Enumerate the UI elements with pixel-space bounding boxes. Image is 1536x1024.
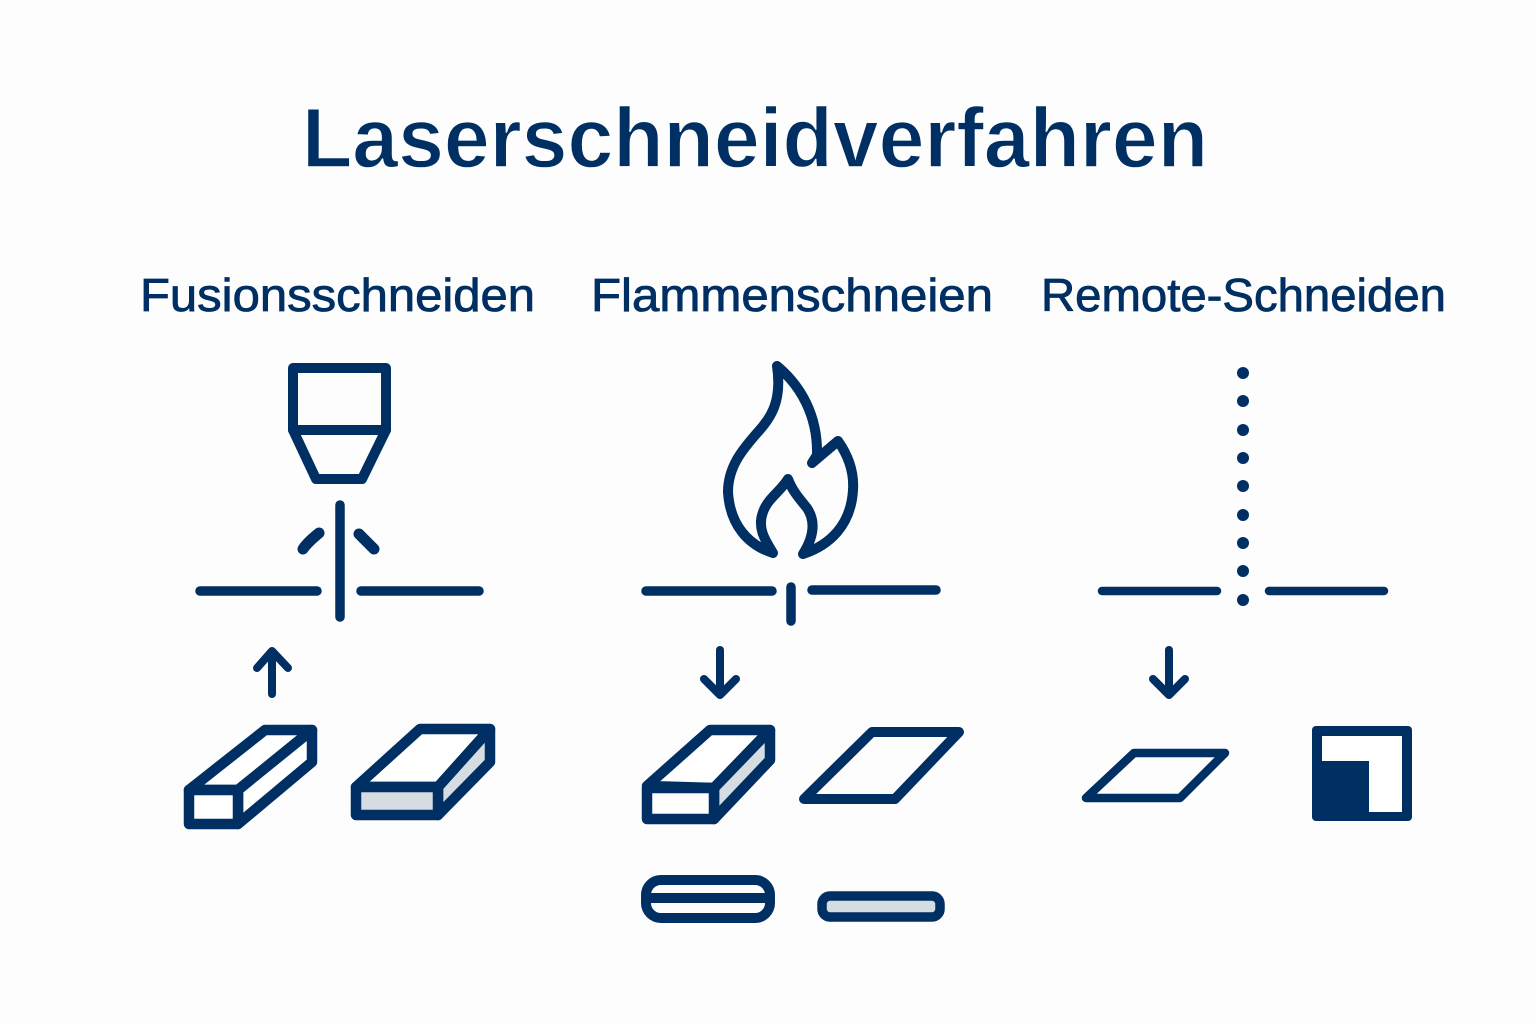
panel: Flammenschneiden diagrams [646,366,959,918]
panel: Fusionsschneiden diagrams [189,368,490,824]
arrow: up [257,651,288,694]
panel: Remote-Schneiden diagrams [1086,367,1412,821]
icon: thin grey bar [822,896,940,917]
icon: flame [728,366,853,554]
icon: flat sheet [804,732,959,799]
icon: narrow block [189,730,312,824]
icon: small flat sheet [1086,753,1225,798]
icon: laser beam with sparks [303,505,374,617]
workpiece cut line [646,587,936,621]
title: Laserschneidverfahren [302,91,1208,185]
icon: dotted remote beam [1237,367,1249,606]
workpiece cut line [200,586,479,596]
icon: block with grey side [647,730,770,819]
arrow: down [704,650,736,695]
icon: wide block with grey faces [356,729,490,815]
icon: laser nozzle [293,368,386,479]
arrow: down [1153,650,1185,695]
heading: Fusionsschneiden: Fusionsschneiden [140,269,535,321]
heading: Flammenschneien: Flammenschneien [591,269,993,321]
heading: Remote-Schneiden: Remote-Schneiden [1041,269,1446,321]
icon: square with filled corner [1312,726,1412,821]
workpiece cut line [1102,587,1384,595]
icon: double bar [646,880,770,918]
